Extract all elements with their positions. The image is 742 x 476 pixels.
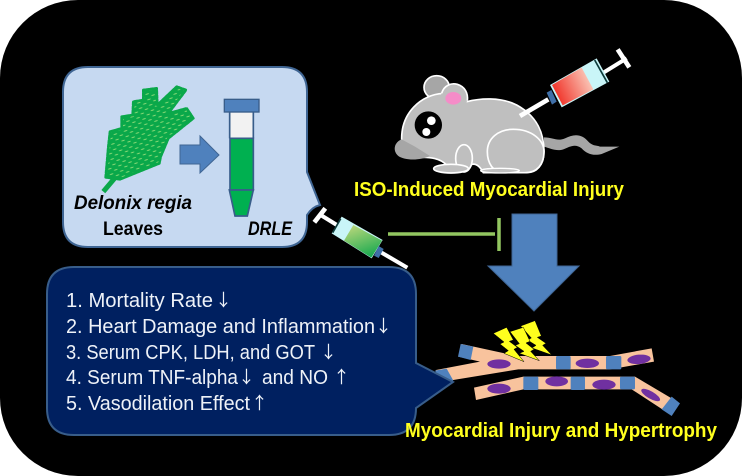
- arrow: injury progression: [488, 214, 579, 311]
- label: Leaves: Leaves: [103, 219, 163, 240]
- back ear: [424, 76, 449, 99]
- hind foot: [481, 168, 519, 173]
- front ear: [441, 84, 467, 112]
- nose: [395, 139, 430, 159]
- effects list: ↓: [215, 286, 232, 311]
- front leg: [456, 145, 472, 172]
- icon: green leaf: [103, 87, 193, 192]
- effects list: ↓: [238, 363, 255, 388]
- inhibition line: [388, 218, 499, 251]
- icon: DRLE tube: [224, 99, 259, 216]
- icon: cardiac muscle fibres: [435, 321, 680, 416]
- label: DRLE: DRLE: [248, 219, 293, 240]
- effects list: ↑: [333, 363, 350, 388]
- body: [402, 93, 544, 173]
- arrow: leaves to extract: [180, 136, 219, 173]
- label: ISO-Induced Myocardial Injury: ISO-Induced Myocardial Injury: [354, 179, 625, 201]
- tail: [544, 135, 619, 155]
- lower fibre: [474, 377, 672, 410]
- icon: mouse: [395, 76, 619, 173]
- label: Delonix regia: Delonix regia: [74, 193, 192, 214]
- panel: Delonix regia leaves to DRLE: [63, 67, 320, 247]
- effects list: 4. Serum TNF-alpha: [66, 367, 239, 389]
- effects list: 2. Heart Damage and Inflammation: [66, 316, 375, 338]
- effects list: 5. Vasodilation Effect: [66, 393, 250, 415]
- effects list: ↓: [375, 312, 392, 337]
- eye: [415, 111, 442, 139]
- effects list: ↓: [320, 338, 337, 363]
- blue junctions: [435, 344, 680, 416]
- icon: DRLE syringe: [314, 208, 407, 268]
- effects list: and NO: [262, 367, 328, 389]
- effects list: [66, 286, 392, 415]
- purple nuclei: [487, 354, 662, 404]
- effects list: 3. Serum CPK, LDH, and GOT: [66, 342, 315, 364]
- haunch: [487, 129, 544, 173]
- effects list: 1. Mortality Rate: [66, 290, 213, 312]
- label: Myocardial Injury and Hypertrophy: Myocardial Injury and Hypertrophy: [405, 420, 718, 442]
- lightning bolts: [493, 321, 552, 362]
- upper fibre: [436, 344, 654, 382]
- effects list: ↑: [251, 389, 268, 414]
- front foot: [434, 164, 468, 173]
- panel: DRLE effects: [47, 267, 453, 435]
- icon: ISO syringe: [520, 49, 629, 116]
